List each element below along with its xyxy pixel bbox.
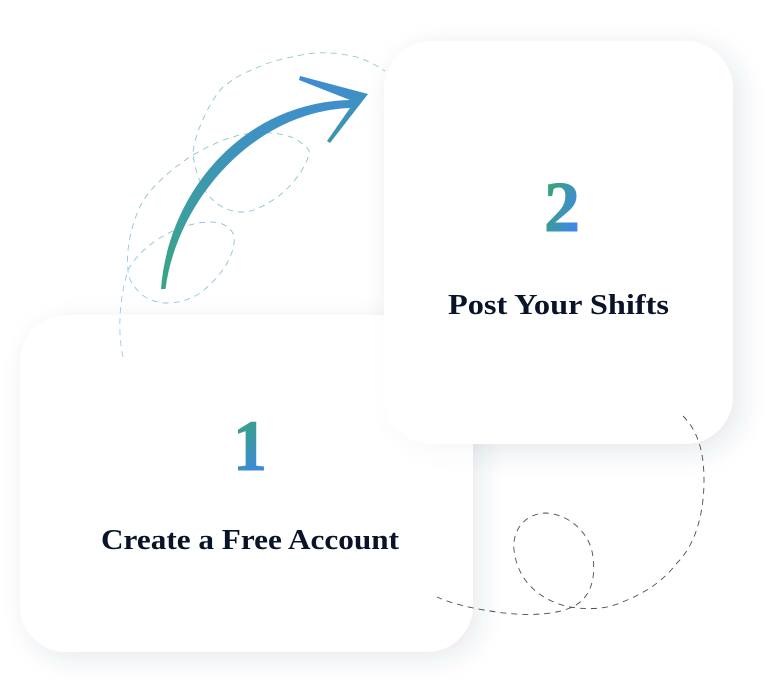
step 2 heading: Post Your Shifts xyxy=(448,289,669,321)
decorative dashed path: light loops xyxy=(120,53,385,357)
decorative dashed path: dark loop xyxy=(437,416,704,614)
panel: step 1 card xyxy=(20,315,473,652)
panel: step 2 card xyxy=(384,41,733,444)
step 2 number: 2 xyxy=(544,167,580,247)
step 1 number: 1 xyxy=(233,406,267,486)
arrow: curved gradient arrow from step 1 to step 2 xyxy=(161,76,368,289)
step 1 heading: Create a Free Account xyxy=(101,524,399,556)
